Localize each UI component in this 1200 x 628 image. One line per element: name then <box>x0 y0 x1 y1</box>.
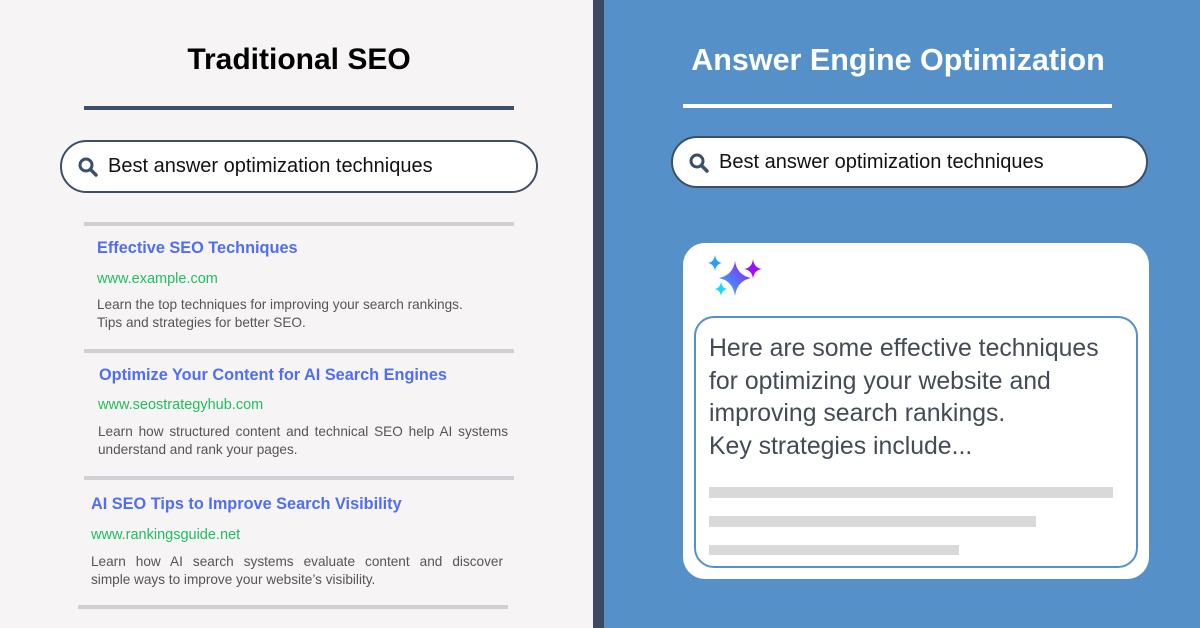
answer text <box>709 335 1099 460</box>
result 2: www.seostrategyhub.com <box>98 397 263 413</box>
answer card <box>683 243 1149 579</box>
panel: traditional SEO <box>60 43 538 609</box>
result 3: www.rankingsguide.net <box>91 527 240 543</box>
icon: sparkles <box>708 255 762 296</box>
result 3: simple ways to improve your website’s visibility. <box>91 572 375 587</box>
answer text: Key strategies include... <box>709 433 972 460</box>
search box left <box>60 140 538 193</box>
result 1: www.example.com <box>97 271 218 287</box>
search box right: Best answer optimization techniques <box>719 151 1044 173</box>
icon: magnifier <box>78 158 98 177</box>
result 1: Learn the top techniques for improving your search rankings. <box>97 297 463 312</box>
answer text: for optimizing your website and <box>709 368 1051 395</box>
heading: Traditional SEO: Traditional SEO <box>187 43 411 76</box>
heading: Answer Engine Optimization: Answer Engine Optimization <box>691 43 1105 77</box>
result 1: Tips and strategies for better SEO. <box>97 315 306 330</box>
divider <box>593 0 604 628</box>
panel: answer engine optimization <box>604 0 1200 628</box>
result 3: Learn how AI search systems evaluate content and discover <box>91 554 503 569</box>
result 1 <box>97 239 463 330</box>
search box right <box>671 136 1148 188</box>
result 2 <box>98 366 508 457</box>
search box left: Best answer optimization techniques <box>108 155 433 177</box>
result 2: Optimize Your Content for AI Search Engines <box>99 366 447 384</box>
result 1: Effective SEO Techniques <box>97 239 298 257</box>
icon: magnifier <box>690 154 709 173</box>
answer box <box>694 316 1138 568</box>
result 2: Learn how structured content and technical SEO help AI systems understand and rank your pages. <box>98 424 508 457</box>
answer text: Here are some effective techniques <box>709 335 1099 362</box>
result 3 <box>91 495 503 587</box>
answer text: improving search rankings. <box>709 400 1005 427</box>
result 3: AI SEO Tips to Improve Search Visibility <box>91 495 402 513</box>
